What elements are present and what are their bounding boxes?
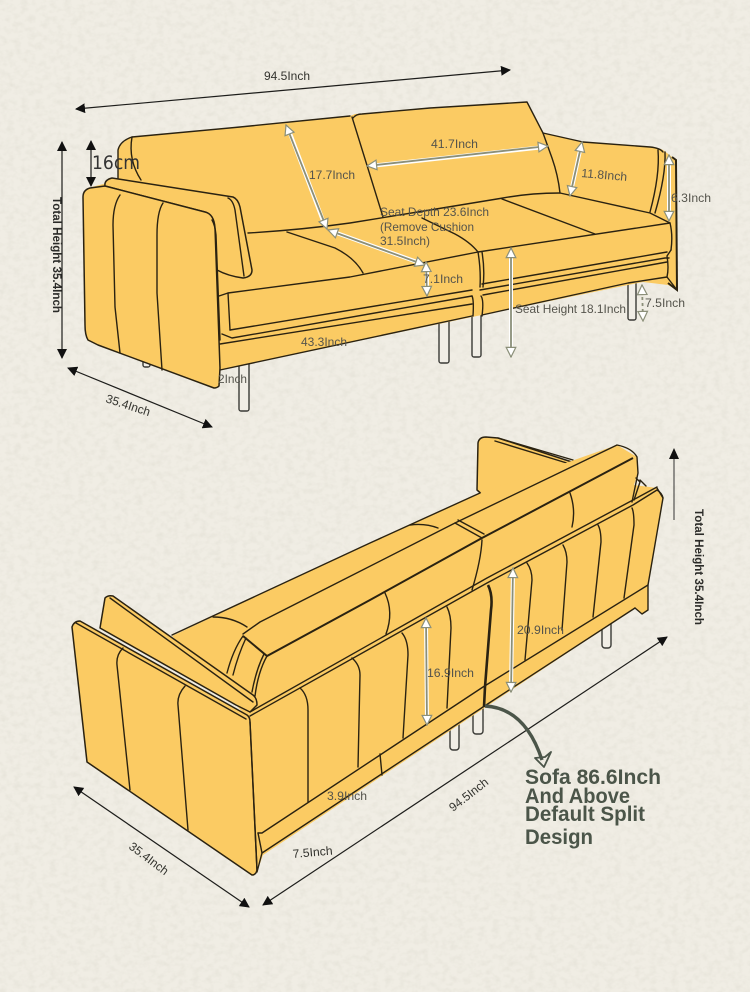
rear view labels: [126, 509, 706, 878]
second arm cushion edge: [110, 598, 253, 702]
module split seam: [484, 585, 492, 707]
rear view labels: 16.9Inch: [427, 666, 474, 680]
far arm: [477, 437, 575, 510]
front view black dimension arrows: [62, 70, 510, 427]
front view labels: 6.3Inch: [671, 191, 711, 205]
rear panel seams: [300, 508, 634, 802]
front view labels: 35.4Inch: [104, 392, 152, 419]
front view labels: [50, 69, 711, 419]
legs: [450, 620, 611, 750]
callout: split design note: Sofa 86.6Inch: [525, 766, 661, 789]
second arm cushion: [100, 596, 257, 712]
rear panel and base: [250, 487, 663, 872]
front view labels: 94.5Inch: [264, 69, 310, 83]
seat cushions: [219, 193, 672, 330]
arm cushion inner edge: [228, 198, 244, 276]
front view labels: 11.8Inch: [581, 166, 628, 184]
near arm details: [76, 623, 246, 830]
near arm panel: [83, 186, 220, 388]
back cushions: [118, 102, 677, 290]
callout: split design note: [525, 766, 661, 849]
front view labels: 43.3Inch: [301, 335, 347, 349]
front view labels: 7.5Inch: [645, 296, 685, 310]
rear view black dimension arrows: [74, 448, 679, 907]
split design curved arrow: [485, 706, 551, 767]
sofa rear view illustration: [72, 437, 663, 875]
seat rails: [220, 250, 677, 370]
seat and back silhouette: [172, 445, 663, 872]
front view labels: 31.5Inch): [380, 234, 430, 248]
callout: split design note: And Above: [525, 785, 630, 808]
front view labels: 17.7Inch: [309, 168, 355, 182]
arm cushion: [105, 178, 252, 278]
callout: split design note: Design: [525, 826, 593, 849]
front view labels: Seat Depth 23.6Inch: [380, 205, 489, 219]
side far details: [634, 478, 663, 500]
sofa front view illustration: [83, 102, 677, 411]
front view labels: 41.7Inch: [431, 137, 478, 151]
front view labels: 2Inch: [218, 372, 247, 386]
front view labels: Seat Height 18.1Inch: [515, 302, 626, 316]
back cushions: [227, 445, 638, 696]
arm panel details: [113, 195, 220, 370]
sofa silhouette: [83, 102, 677, 388]
near arm panel: [72, 621, 257, 875]
rear view labels: 20.9Inch: [517, 623, 564, 637]
callout: split design note: Default Split: [525, 803, 645, 826]
front view labels: (Remove Cushion: [380, 220, 474, 234]
rear view labels: Total Height 35.4Inch: [692, 509, 706, 625]
rear view labels: 94.5Inch: [446, 775, 491, 814]
seat outline: [172, 493, 480, 635]
far arm top edge: [495, 438, 573, 464]
rear view white dimension arrows: [426, 568, 513, 725]
front view labels: 7.1Inch: [423, 272, 463, 286]
front view labels: 16cm: [92, 152, 140, 174]
rear view labels: 35.4Inch: [126, 839, 171, 878]
rear view labels: 3.9Inch: [327, 789, 367, 803]
front view white dimension arrows: [286, 125, 669, 357]
legs: [143, 278, 636, 411]
rear view labels: 7.5Inch: [292, 844, 333, 861]
front view labels: Total Height 35.4Inch: [50, 197, 64, 313]
